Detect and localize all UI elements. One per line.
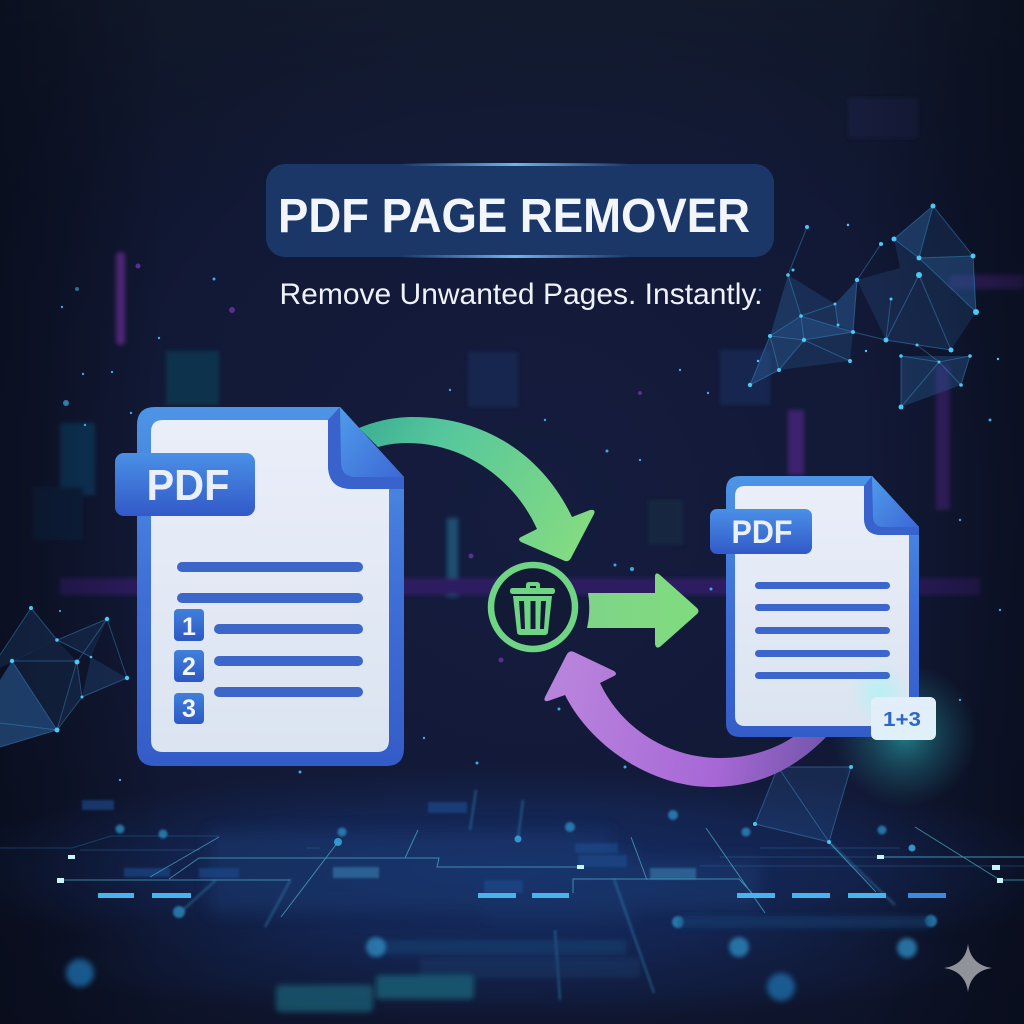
title text: PDF PAGE REMOVER: [278, 190, 750, 243]
icon: trash in circle: [491, 565, 575, 649]
number badges: [174, 609, 204, 724]
PDF tag: [710, 509, 812, 554]
arrow: green curved: [359, 417, 594, 561]
network: top right: [748, 204, 999, 410]
text lines: [755, 582, 890, 679]
text lines: [177, 562, 363, 697]
PDF tag: PDF: [732, 514, 792, 550]
page fold: [328, 407, 404, 489]
arrow: green straight: [587, 573, 698, 648]
paper glow: [850, 660, 909, 726]
network: lower shard: [753, 765, 853, 844]
arrow: purple curved: [544, 651, 828, 787]
page fold: [864, 476, 919, 535]
particles: purple: [136, 264, 642, 662]
number badges: 3: [182, 695, 196, 723]
document: result PDF: [710, 476, 936, 740]
icon: sparkle watermark: [944, 944, 992, 992]
PDF tag: [115, 453, 255, 516]
particles: [61, 224, 1001, 781]
glow: [833, 663, 977, 807]
document: original PDF: [115, 407, 404, 766]
PDF tag: PDF: [146, 461, 230, 510]
page badge: 1+3: [883, 709, 921, 731]
circuit floor: [0, 765, 1024, 1020]
network: left: [0, 606, 129, 747]
title banner: [266, 163, 774, 258]
number badges: 1: [182, 613, 196, 641]
number badges: 2: [182, 653, 196, 681]
page badge: [871, 697, 936, 740]
subtitle: Remove Unwanted Pages. Instantly.: [280, 278, 762, 311]
